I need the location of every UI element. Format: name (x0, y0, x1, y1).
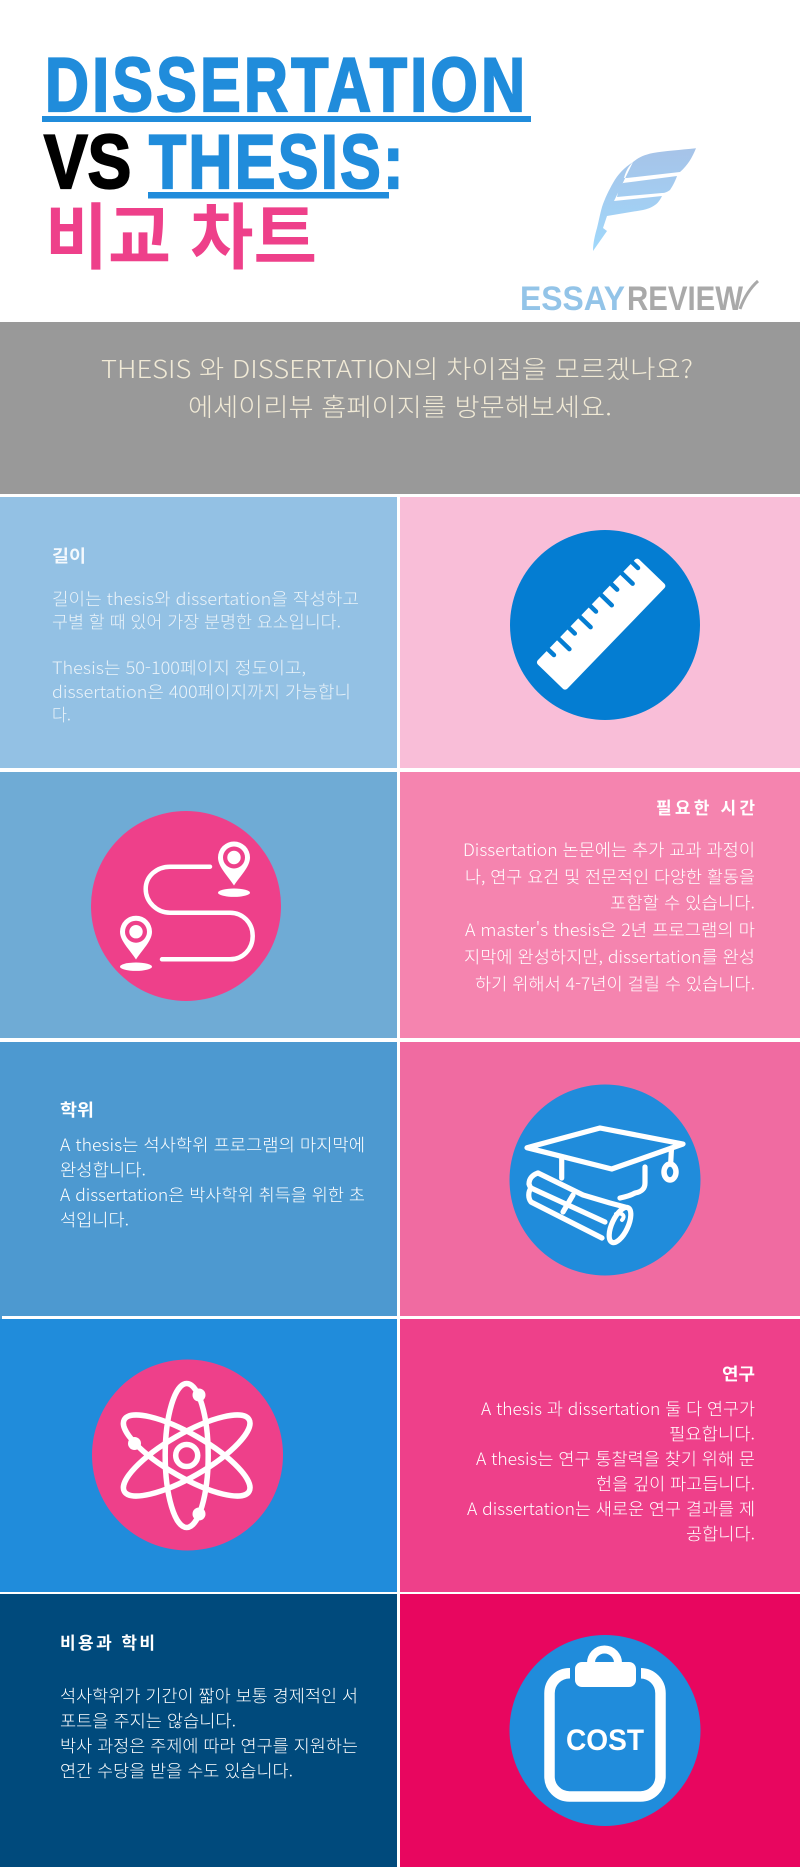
icon: route with map pins (91, 811, 281, 1001)
logo wordmark (520, 280, 758, 318)
body: research: 헌을 깊이 파고듭니다. (596, 1470, 755, 1495)
intro text (101, 350, 693, 424)
body: length: dissertation은 400페이지까지 가능합니 (52, 678, 351, 703)
body: time required: A master's thesis은 2년 프로그램의 마 (465, 916, 755, 941)
body: time required: Dissertation 논문에는 추가 교과 과정이 (463, 836, 755, 861)
panel: cost text (0, 1594, 397, 1867)
body: research: A thesis 과 dissertation 둘 다 연구가 (481, 1395, 755, 1420)
body: time required: 포함할 수 있습니다. (610, 889, 755, 914)
heading: degree: 학위 (60, 1096, 94, 1121)
icon: clipboard with cost label (510, 1635, 700, 1826)
panel: cost icon (400, 1594, 800, 1867)
body: length: 구별 할 때 있어 가장 분명한 요소입니다. (52, 608, 341, 633)
panel: degree text (0, 1042, 397, 1319)
body: research: 공합니다. (686, 1520, 755, 1545)
body: research: A dissertation는 새로운 연구 결과를 제 (467, 1495, 755, 1520)
heading: cost and tuition: 비용과 학비 (60, 1629, 155, 1654)
body: research: A thesis는 연구 통찰력을 찾기 위해 문 (476, 1445, 755, 1470)
body: cost and tuition: 석사학위가 기간이 짧아 보통 경제적인 서 (60, 1682, 358, 1707)
body: length: Thesis는 50-100페이지 정도이고, (52, 654, 306, 679)
panel: research text (400, 1319, 800, 1592)
body: length (52, 585, 359, 726)
body: research: 필요합니다. (669, 1420, 755, 1445)
panel: degree icon (400, 1042, 800, 1316)
body: degree: 석입니다. (60, 1206, 129, 1231)
panel: length text (0, 497, 397, 768)
logo: essay review (520, 148, 758, 318)
body: time required: 나, 연구 요건 및 전문적인 다양한 활동을 (465, 863, 755, 888)
icon: ruler (510, 530, 700, 720)
icon: graduation cap and diploma (510, 1084, 700, 1276)
body: cost and tuition: 포트을 주지는 않습니다. (60, 1707, 236, 1732)
panel: intro banner (0, 322, 800, 494)
body: cost and tuition: 연간 수당을 받을 수도 있습니다. (60, 1757, 293, 1782)
logo wordmark: ESSAY (520, 280, 625, 318)
title line: vs thesis: THESIS: (149, 120, 403, 205)
heading: length: 길이 (52, 542, 86, 567)
body: degree: A dissertation은 박사학위 취득을 위한 초 (60, 1181, 365, 1206)
heading: time required: 필요한 시간 (656, 794, 755, 819)
panel: time required text (400, 772, 800, 1038)
body: length: 길이는 thesis와 dissertation을 작성하고 (52, 585, 359, 610)
body: time required: 지막에 완성하지만, dissertation를 완성 (464, 943, 755, 968)
icon: atom (92, 1360, 283, 1550)
heading: research: 연구 (722, 1360, 755, 1385)
title line: comparison chart: 비교 (45, 179, 171, 284)
title (42, 43, 531, 284)
title line: dissertation: DISSERTATION (45, 43, 525, 128)
icon: feather (593, 148, 696, 251)
logo wordmark: REVIEW (627, 280, 744, 318)
body: degree: 완성합니다. (60, 1156, 146, 1181)
intro text: THESIS 와 DISSERTATION의 차이점을 모르겠나요? (101, 350, 693, 386)
body: degree (60, 1131, 365, 1231)
panel: research icon (0, 1319, 397, 1592)
intro text: 에세이리뷰 홈페이지를 방문해보세요. (188, 388, 612, 424)
body: time required (463, 836, 755, 995)
body: length: 다. (52, 701, 71, 726)
title line: comparison chart (45, 179, 317, 284)
body: cost and tuition: 박사 과정은 주제에 따라 연구를 지원하는 (60, 1732, 358, 1757)
body: cost and tuition (60, 1682, 358, 1782)
panel: route icon (0, 772, 397, 1038)
title line: comparison chart: 차트 (190, 179, 317, 284)
panel: length icon (400, 497, 800, 768)
title line: vs thesis: VS (44, 120, 131, 205)
body: degree: A thesis는 석사학위 프로그램의 마지막에 (60, 1131, 365, 1156)
body: time required: 하기 위해서 4-7년이 걸릴 수 있습니다. (475, 970, 755, 995)
icon: clipboard with cost label: COST (566, 1724, 644, 1757)
body: research (467, 1395, 755, 1545)
